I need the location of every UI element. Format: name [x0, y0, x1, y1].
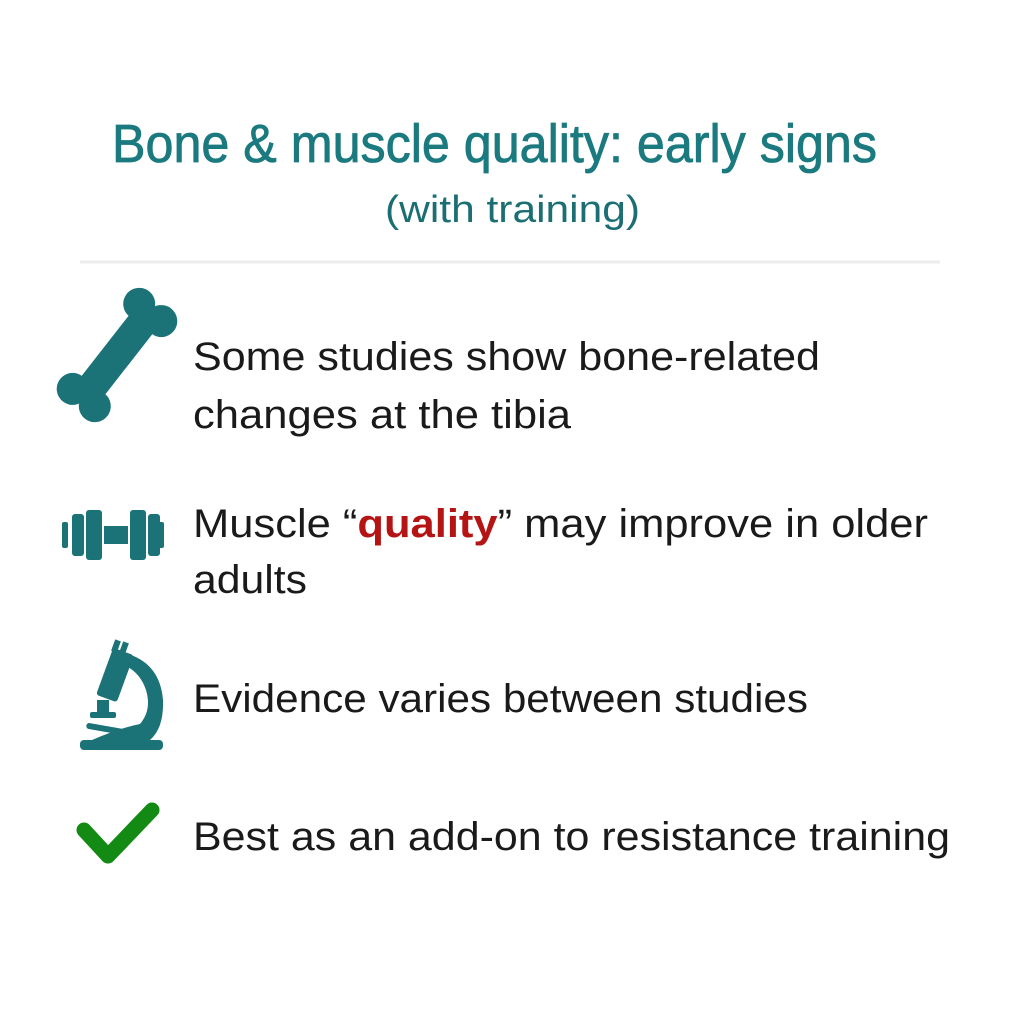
item 3: evidence: [80, 639, 808, 750]
text: best: Best as an add-on to resistance training: [193, 815, 950, 859]
title: [112, 114, 877, 231]
item 4: best: [84, 810, 950, 859]
icon: checkmark: [84, 810, 152, 856]
title: Bone & muscle quality: early signs: [112, 114, 877, 174]
subtitle: (with training): [385, 189, 640, 231]
text: muscle: Muscle “ quality ” may improve in older: [193, 502, 928, 546]
item 2: muscle: adults: [193, 558, 307, 602]
icon: bone: [50, 281, 184, 429]
icon: dumbbell: [62, 510, 164, 560]
item 2: muscle: [62, 502, 928, 602]
text: evidence: Evidence varies between studies: [193, 677, 808, 721]
icon: microscope: [80, 639, 163, 750]
text: bone: Some studies show bone-related: [193, 335, 820, 379]
item 1: bone: changes at the tibia: [193, 393, 572, 437]
item 1: bone: [50, 281, 820, 437]
